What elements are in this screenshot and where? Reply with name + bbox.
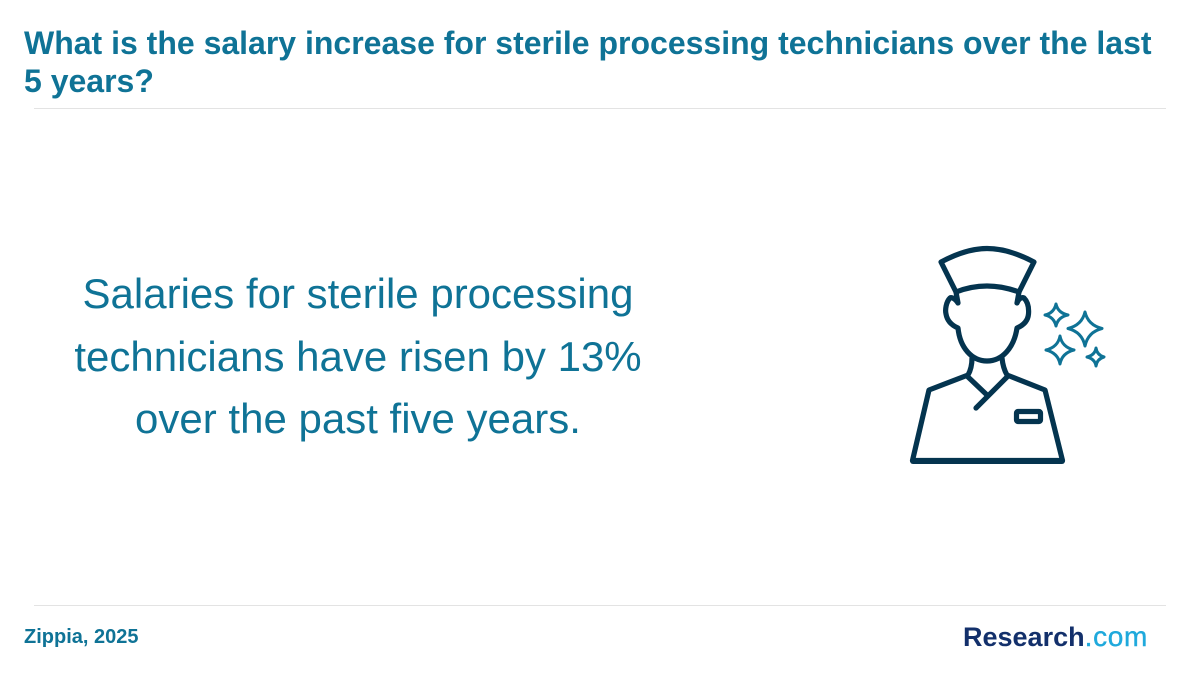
- logo: Research.com: Research.com: [963, 621, 1148, 652]
- main statement: technicians have risen by 13%: [74, 332, 642, 380]
- title: What is the salary increase for sterile processing technicians over the last: [24, 25, 1152, 61]
- main statement: Salaries for sterile processing: [83, 270, 633, 317]
- title: [24, 25, 1152, 99]
- source: Zippia, 2025: [24, 626, 138, 648]
- main statement: [74, 270, 642, 442]
- main statement: over the past five years.: [135, 395, 581, 442]
- title: 5 years?: [24, 63, 154, 99]
